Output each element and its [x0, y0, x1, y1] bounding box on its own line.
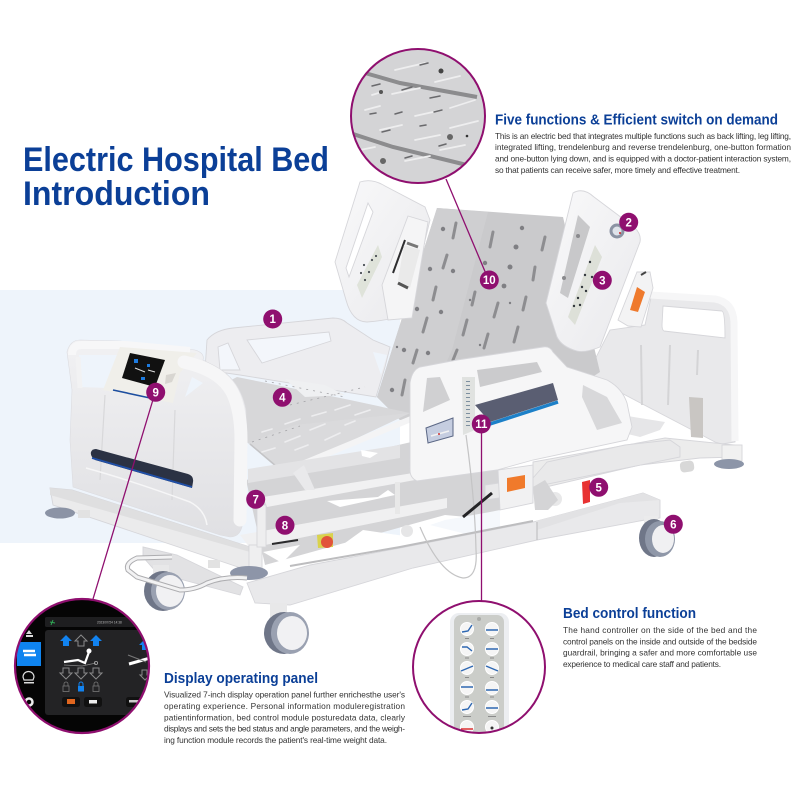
- badge 1: [263, 310, 282, 328]
- badge 1: 1: [269, 314, 276, 326]
- badge 8: 8: [282, 520, 289, 532]
- remote cable: [420, 435, 476, 578]
- icon: second posture panel: [128, 640, 150, 680]
- hand controller on rail: [462, 377, 475, 435]
- text block: display operating panel: operating experience. Personal information moduleregistration: [164, 701, 405, 711]
- dark label strip: [91, 449, 193, 488]
- badge 6: 6: [670, 519, 677, 531]
- badge 11: [472, 414, 491, 434]
- hospital bed illustration: [45, 181, 744, 654]
- badge 11: 11: [475, 419, 488, 431]
- text block: display operating panel: [164, 690, 406, 745]
- red side brake: [582, 480, 590, 504]
- badge 9: [146, 383, 165, 402]
- title: [23, 141, 329, 213]
- text block: bed control function: experience to medical care staff and patients.: [563, 659, 721, 669]
- leader line to badge 10: [446, 179, 489, 281]
- badge 2: [619, 213, 638, 232]
- badge 2: 2: [625, 217, 632, 229]
- text block: five functions: [495, 131, 791, 175]
- badge 7: [246, 490, 265, 509]
- text block: display operating panel: patientinformation, bed control module posturedata data, clearly: [164, 712, 406, 722]
- text block: bed control function: The hand controller on the side of the bed and the: [563, 625, 757, 635]
- near side rail: [410, 347, 632, 481]
- leader line to badge 11: [480, 424, 482, 602]
- text block: display operating panel: Visualized 7-inch display operation panel further enrichesthe user's: [164, 690, 405, 700]
- seat and leg deck: [187, 377, 411, 473]
- under-bed frame and lifting mechanism: [240, 440, 680, 565]
- badge 4: [273, 388, 292, 407]
- icon: sidebar: [23, 630, 34, 706]
- leader line to badge 9: [93, 393, 155, 599]
- badge 6: [664, 515, 683, 534]
- badge 4: 4: [279, 392, 286, 404]
- icon: up arrows: [60, 635, 102, 646]
- black strut: [463, 493, 492, 517]
- title: Electric Hospital Bed: [23, 141, 329, 179]
- badge 5: [589, 478, 608, 497]
- text block: display operating panel: displays and sets the bed status and angle parameters, and the weigh-: [164, 724, 405, 734]
- caster: right: [639, 516, 675, 557]
- icon: bed posture line: [64, 648, 98, 666]
- icon: down arrows: [60, 668, 102, 679]
- icon: mode buttons: [62, 697, 146, 707]
- callout: display panel circle: [15, 599, 150, 733]
- badge 3: 3: [599, 275, 606, 287]
- badge 9: 9: [152, 387, 159, 399]
- caster: front: [264, 603, 309, 654]
- heading: bed control function: Bed control function: [563, 605, 696, 622]
- controls under rail: [317, 435, 590, 578]
- casters: [144, 516, 675, 654]
- badge 10: 10: [483, 275, 496, 287]
- text block: bed control function: [563, 625, 757, 669]
- head end board: [67, 340, 247, 537]
- right head rail: [546, 191, 640, 352]
- text block: five functions: so that patients can receive safer, more timely and effective treatment.: [495, 165, 740, 175]
- emergency button: [317, 533, 333, 548]
- text block: bed control function: guardrail, bringing a safer and more comfortable use: [563, 648, 757, 658]
- right footboard: [533, 293, 744, 490]
- callout: hand controller circle: [413, 601, 545, 745]
- callout: deck detail circle: [350, 49, 485, 183]
- text block: five functions: This is an electric bed that integrates multiple functions such as back lifting, leg lifting,: [495, 131, 791, 141]
- caster: far left: [144, 565, 185, 611]
- badge 3: [593, 271, 612, 290]
- text block: five functions: integrated lifting, trendelenburg and reverse trendelenburg, one-button formation: [495, 142, 791, 152]
- heading: display operating panel: Display operating panel: [164, 670, 318, 687]
- orange pedal: [507, 475, 525, 492]
- text block: five functions: and one-button lying down, and is equipped with a doctor-patient interaction system,: [495, 154, 791, 164]
- far side rail: [205, 318, 390, 397]
- text block: bed control function: control panels on the inside and outside of the bedside: [563, 637, 757, 647]
- badge 7: 7: [252, 494, 259, 506]
- base frame: [143, 493, 660, 605]
- badge 10: [480, 270, 499, 290]
- text block: display operating panel: ing function module records the patient's real-time weight data.: [164, 735, 387, 745]
- background band: [0, 290, 400, 543]
- icon: locks: [63, 682, 99, 692]
- display panel: [103, 347, 197, 403]
- icon: round gauge: [610, 224, 624, 238]
- badge 5: 5: [595, 482, 602, 494]
- badge 8: [276, 516, 294, 535]
- small label plate: [426, 418, 453, 443]
- backrest deck plate: [377, 208, 600, 425]
- title: Introduction: [23, 175, 210, 213]
- callout: display panel circle: 2023/07/24 14:38: [97, 620, 122, 624]
- hanging orange latch: [618, 272, 653, 327]
- head end frame: [45, 488, 268, 590]
- left head rail: [335, 181, 430, 322]
- number badges: [146, 213, 683, 535]
